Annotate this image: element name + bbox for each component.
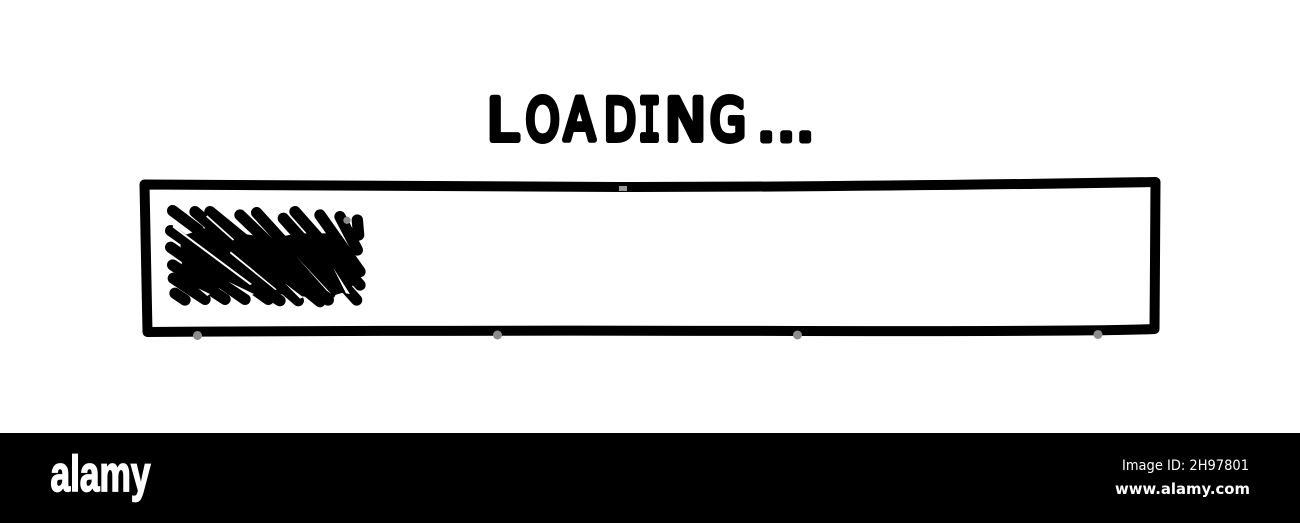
footer band bbox=[0, 433, 1300, 523]
title: LOADING...: . bbox=[796, 86, 814, 154]
title: LOADING...: . bbox=[757, 86, 775, 154]
title: LOADING...: O bbox=[526, 86, 560, 154]
progress bar frame bbox=[144, 182, 1156, 340]
title: LOADING...: I bbox=[638, 88, 661, 160]
alamy logo wordmark: alamy bbox=[50, 446, 151, 502]
progress fill: scribble bbox=[171, 211, 360, 302]
title: LOADING...: D bbox=[604, 86, 636, 154]
title: LOADING...: . bbox=[777, 86, 795, 154]
title: LOADING...: A bbox=[564, 86, 595, 154]
title: LOADING...: G bbox=[710, 86, 746, 154]
title: LOADING... bbox=[487, 86, 814, 160]
title: LOADING...: N bbox=[665, 86, 706, 154]
website: www.alamy.com bbox=[1115, 480, 1250, 498]
scribble gaps bbox=[173, 215, 350, 299]
title: LOADING...: L bbox=[487, 86, 518, 154]
image ID: Image ID: 2H97801 bbox=[1122, 458, 1249, 474]
